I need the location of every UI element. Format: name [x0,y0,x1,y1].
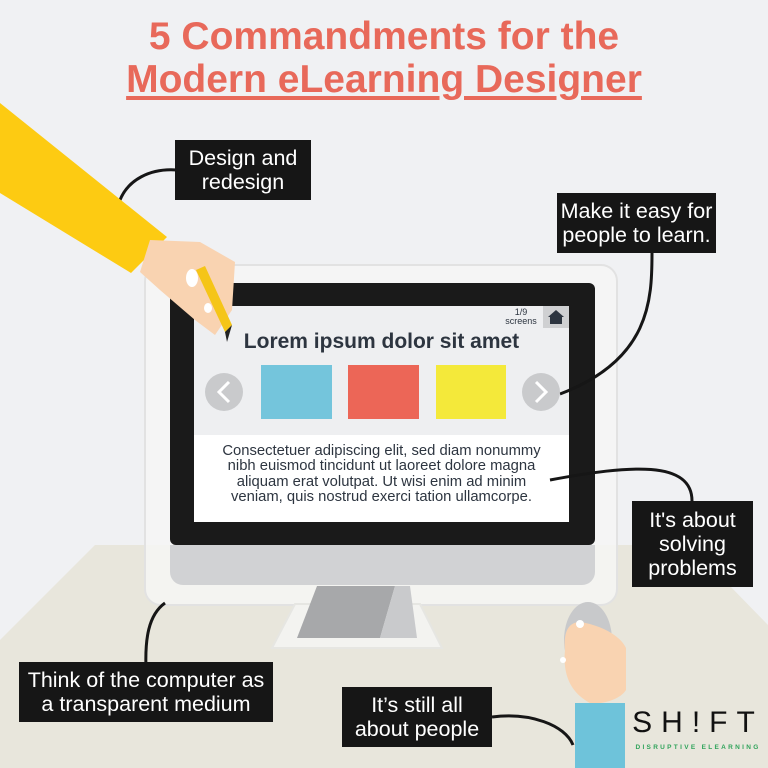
callout: about people [342,687,492,747]
callout: solving problems: It's about [649,508,736,532]
title: Modern eLearning Designer [126,58,642,101]
logo: DISRUPTIVE ELEARNING [635,744,761,751]
callout: design and redesign: redesign [202,170,284,194]
home button [543,306,569,328]
carousel arrows [205,373,243,411]
callout: design and redesign [175,140,311,200]
callout: solving problems [632,501,753,587]
monitor [145,265,617,648]
arm with pencil [0,103,235,342]
screen counter: screens [505,316,537,326]
callout: transparent medium: a transparent medium [41,692,251,716]
title: 5 Commandments for the [149,15,619,58]
callout: make it easy [557,193,716,253]
mouse hand [560,602,626,768]
desk [0,545,768,768]
callout: make it easy: Make it easy for [561,199,712,223]
screen paragraph: Consectetuer adipiscing elit, sed diam nonummy [222,443,541,459]
screen paragraph: aliquam erat volutpat. Ut wisi enim ad minim [237,474,526,490]
screen paragraph: veniam, quis nostrud exerci tation ullamcorpe. [231,489,532,505]
screen paragraph: nibh euismod tincidunt ut laoreet dolore magna [228,458,535,474]
title [126,15,642,101]
colour squares [261,365,332,419]
callout: make it easy: people to learn. [562,223,711,247]
screen counter [505,307,537,326]
callout: design and redesign: Design and [189,146,297,170]
callout: transparent medium [19,662,273,722]
callout: about people: about people [355,717,479,741]
connectors [120,170,692,745]
logo: SH!FT [632,706,764,739]
callout: solving problems: solving [659,532,726,556]
screen paragraph [222,443,541,505]
callout: solving problems: problems [648,556,737,580]
screen counter: 1/9 [515,307,527,317]
callout: transparent medium: Think of the computer as [28,668,264,692]
screen heading: Lorem ipsum dolor sit amet [244,330,519,353]
callout: about people: It’s still all [371,693,463,717]
